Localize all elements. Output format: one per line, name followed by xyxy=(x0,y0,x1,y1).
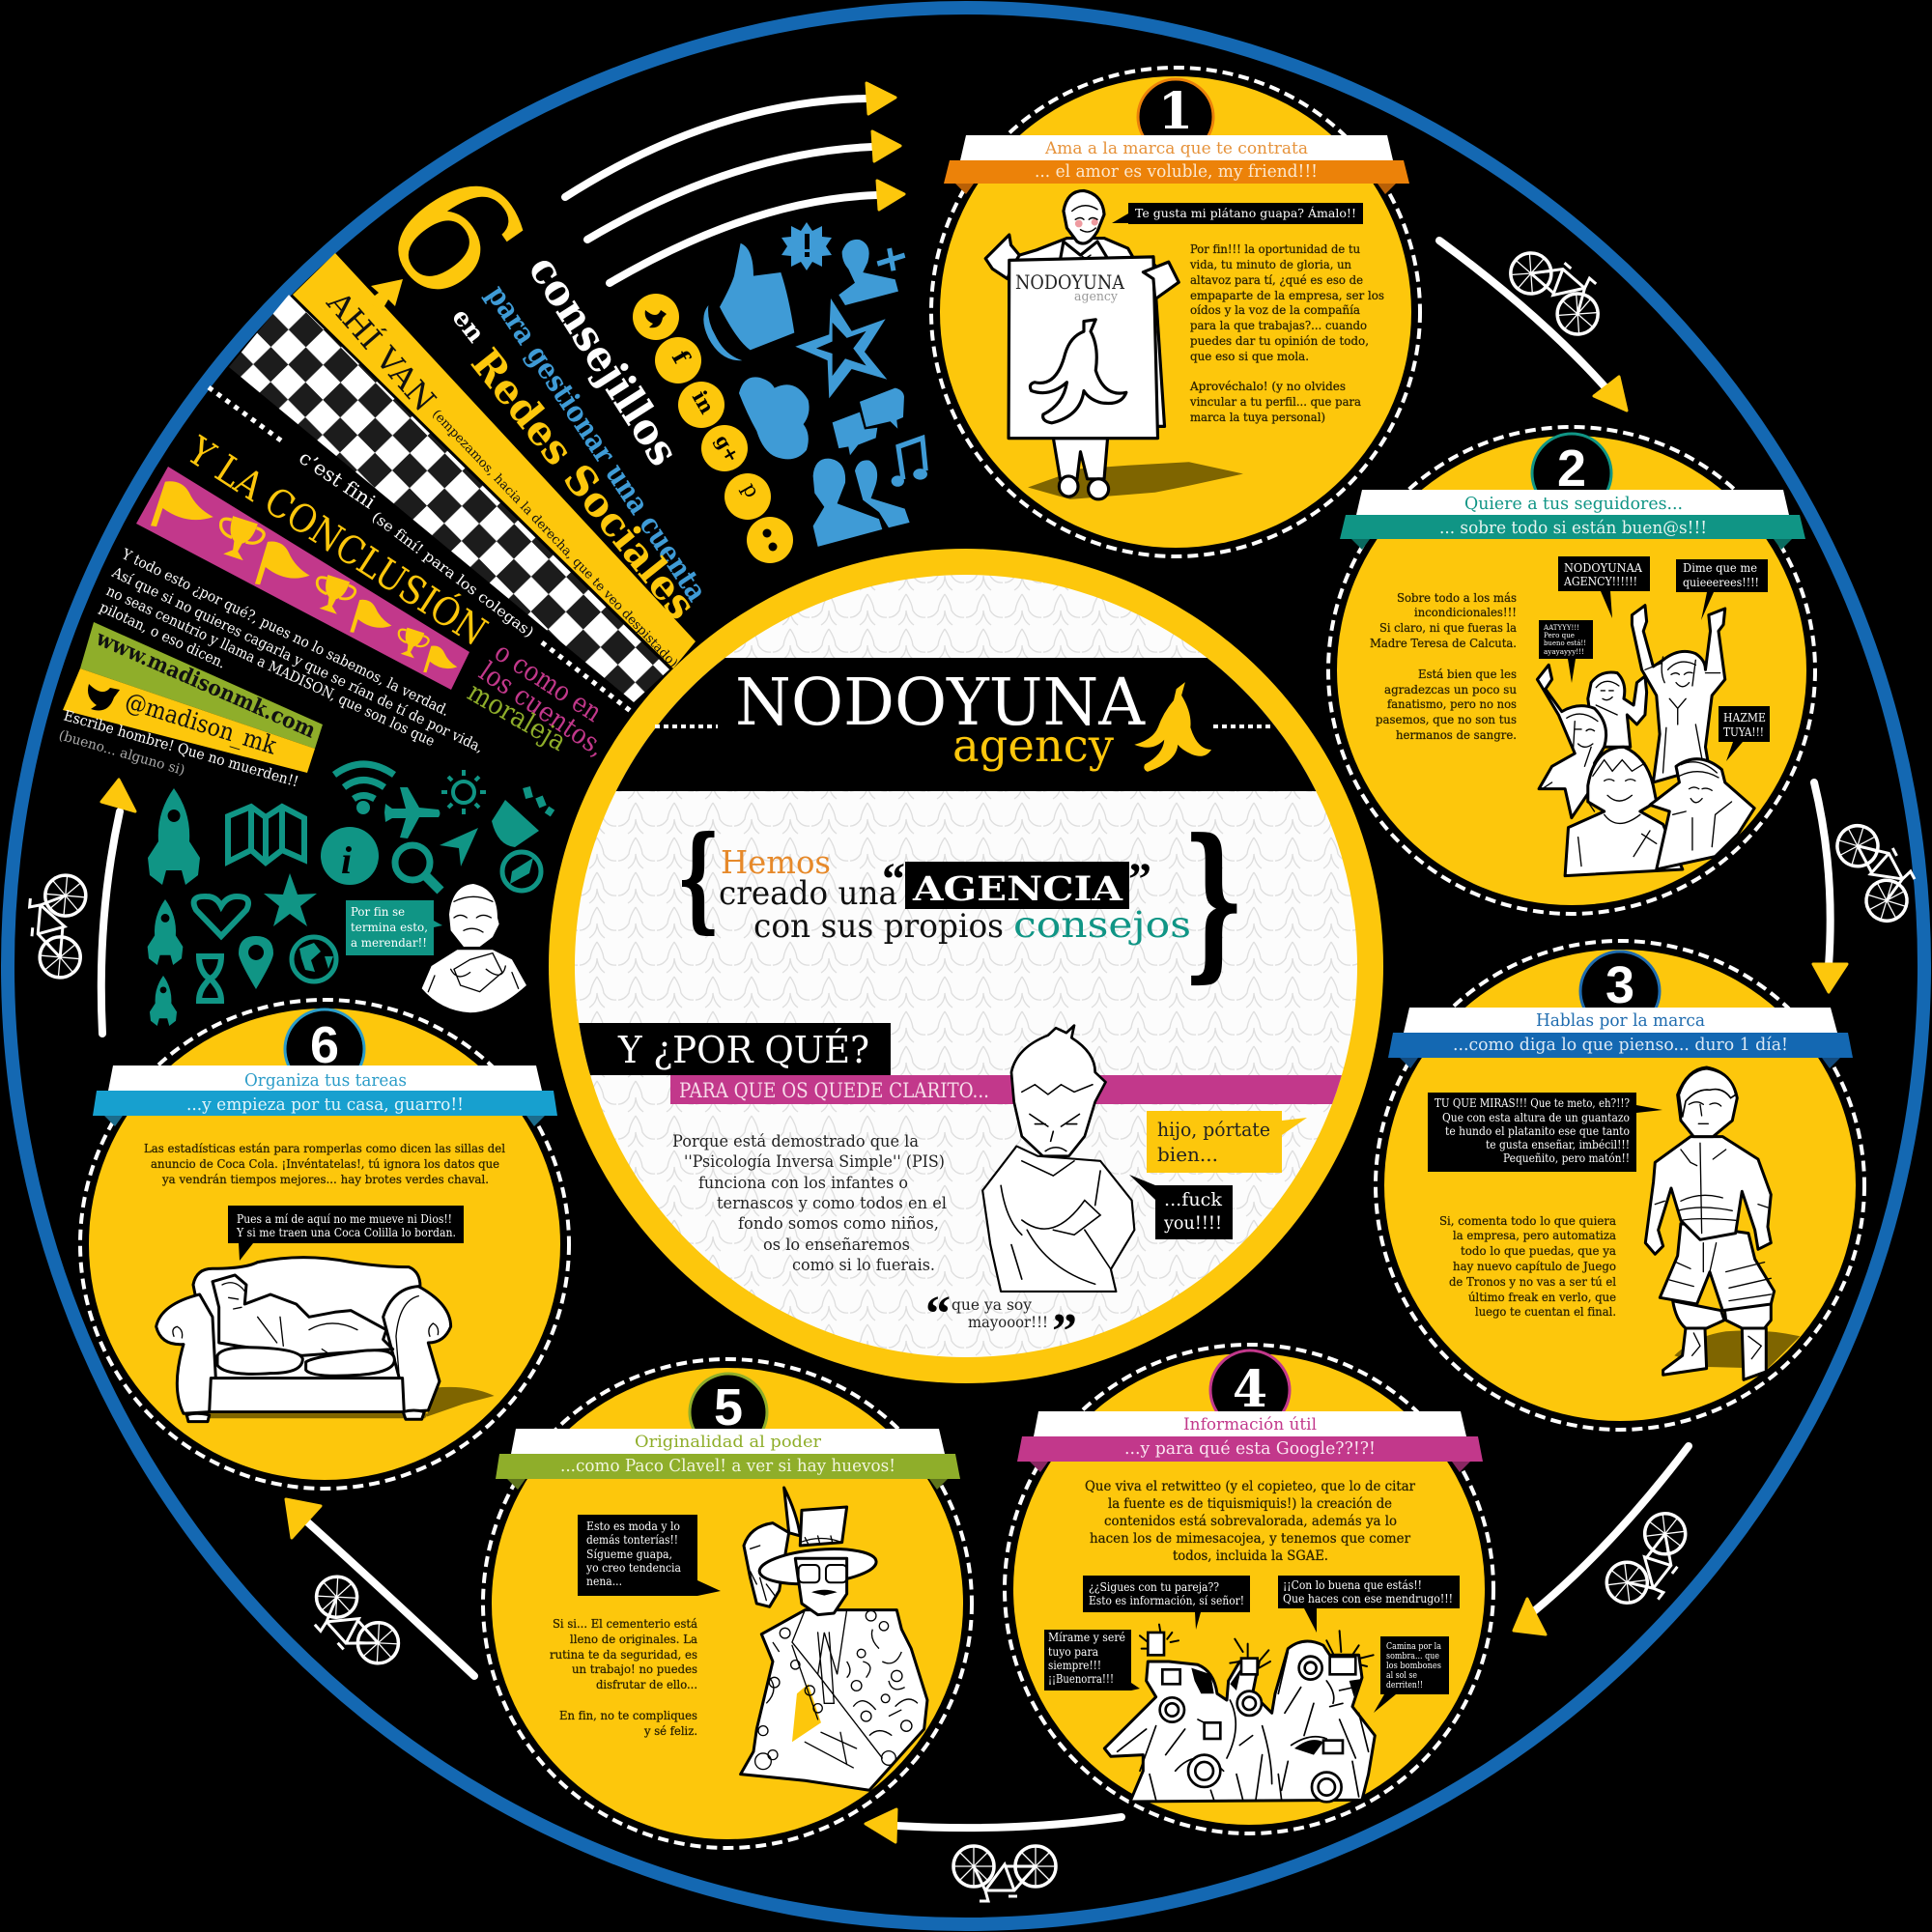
body text 5: En fin, no te compliques xyxy=(559,1708,697,1722)
illustration: man with banana sign xyxy=(985,190,1243,499)
body text: psicología inversa xyxy=(672,1132,947,1275)
speech bubble: hijo pórtate bien: hijo, pórtate xyxy=(1157,1118,1270,1141)
speech bubble 3: te hundo el platanito ese que tanto xyxy=(1445,1124,1630,1138)
icon: compass xyxy=(502,852,541,891)
text: c'est fini: c’est fini xyxy=(295,445,380,513)
icon: hourglass xyxy=(199,956,221,1001)
ribbon title 6: Organiza tus tareas xyxy=(244,1070,407,1091)
body text: psicología inversa: os lo enseñaremos xyxy=(763,1236,910,1255)
speech bubbles 2: Pero que xyxy=(1544,631,1576,639)
body text 2: Madre Teresa de Calcuta. xyxy=(1370,636,1517,650)
title: 6 consejillos para gestionar una cuenta en Redes Sociales: para gestionar una cuenta xyxy=(479,279,714,608)
ribbon title 3: ...como diga lo que pienso... duro 1 día! xyxy=(1453,1035,1788,1055)
body text 3: hay nuevo capítulo de Juego xyxy=(1453,1259,1616,1273)
social media circles: f xyxy=(667,346,696,369)
icon: add person xyxy=(838,240,905,305)
ribbon title 3: Hablas por la marca xyxy=(1536,1010,1705,1031)
body text 1: que eso si que mola. xyxy=(1190,349,1309,363)
icon: star xyxy=(264,873,317,926)
big number 6: 6 xyxy=(345,140,560,333)
number badge 4: 4 xyxy=(1233,1360,1267,1419)
body text 1: altavoz para tí, ¿qué es eso de xyxy=(1190,272,1363,287)
speech bubble 5: yo creo tendencia xyxy=(585,1561,681,1575)
social media circles xyxy=(633,294,793,563)
ribbon title 6: ...y empieza por tu casa, guarro!! xyxy=(186,1094,464,1115)
number badge 1: 1 xyxy=(1158,82,1193,141)
speech bubbles 4: Que haces con ese mendrugo!!! xyxy=(1283,1592,1453,1605)
icon: heart xyxy=(194,896,248,936)
headline: Hemos creado una agencia xyxy=(676,804,1245,998)
speech bubble 1: Te gusta mi plátano guapa? Ámalo!! xyxy=(1135,206,1356,220)
illustration: angry boy xyxy=(982,1026,1134,1292)
icon: map pin xyxy=(239,936,273,989)
arrow and bike: circle 1 to 2 xyxy=(1439,234,1627,411)
body text 1: vincular a tu perfil... que para xyxy=(1189,394,1362,409)
illustration: dwarf in armor xyxy=(1645,1067,1800,1379)
speech bubbles 2 xyxy=(1539,556,1770,761)
speech bubble: por fin se termina esto xyxy=(346,900,442,955)
text: moraleja: los cuentos, xyxy=(473,655,611,763)
speech bubble: por fin se termina esto: Por fin se xyxy=(351,904,405,919)
ribbon title 5: ...como Paco Clavel! a ver si hay huevos! xyxy=(560,1456,895,1476)
headline: Hemos creado una agencia: con sus propios xyxy=(753,907,1004,946)
magenta subheading bar: PARA QUE OS QUEDE CLARITO... xyxy=(679,1079,989,1102)
speech bubbles 2: Dime que me xyxy=(1683,561,1757,575)
text: c'est fini xyxy=(295,445,537,641)
body text 2: Si claro, ni que fueras la xyxy=(1379,620,1518,635)
illustration: man asleep on sofa xyxy=(156,1258,495,1422)
speech bubble 5 xyxy=(578,1515,721,1596)
speech bubble 5: Esto es moda y lo xyxy=(586,1520,680,1533)
speech bubbles 2: quieeerees!!!! xyxy=(1683,576,1759,589)
yellow band: ahí van: AHÍ VAN xyxy=(319,284,443,418)
header band: logo xyxy=(616,658,1316,791)
body text 2: hermanos de sangre. xyxy=(1396,727,1517,742)
quote: que ya soy mayooor xyxy=(925,1287,1077,1359)
speech bubble 3: Que con esta altura de un guantazo xyxy=(1442,1111,1630,1124)
body text 1: para la que trabajas?... cuando xyxy=(1190,318,1367,332)
sign logo xyxy=(1015,270,1124,304)
icon: airplane xyxy=(384,787,440,838)
central circle panel xyxy=(549,549,1383,1383)
body text 4 xyxy=(1085,1479,1415,1564)
speech bubble: fuck you: you!!!! xyxy=(1163,1212,1222,1234)
icon: wifi xyxy=(334,764,394,811)
body text: psicología inversa: como si lo fuerais. xyxy=(792,1256,935,1275)
speech bubbles 4: ¿¿Sigues con tu pareja?? xyxy=(1089,1580,1219,1594)
icon: navigation arrow xyxy=(440,828,478,867)
icon: thumbs up xyxy=(703,243,794,360)
heading: Y la conclusión: Y LA CONCLUSIÓN xyxy=(179,427,495,655)
body text 3: último freak en verlo, que xyxy=(1468,1290,1616,1304)
body text 1: empaparte de la empresa, ser los xyxy=(1190,288,1384,302)
speech bubbles 2: HAZME xyxy=(1723,711,1766,724)
body text 4: Que viva el retwitteo (y el copieteo, que lo de citar xyxy=(1085,1479,1415,1494)
speech bubble 6: Pues a mí de aquí no me mueve ni Dios!! xyxy=(237,1212,452,1226)
body text 1: Por fin!!! la oportunidad de tu xyxy=(1190,242,1360,256)
panel: tip 6 xyxy=(80,1000,569,1489)
ribbon title 6 xyxy=(93,1065,557,1126)
arrow and bike: left to top xyxy=(24,780,135,1034)
logo word agency: agency xyxy=(952,720,1114,773)
speech bubble 5: nena... xyxy=(586,1575,622,1588)
panel: tip 1 xyxy=(931,68,1420,556)
speech bubbles 4: tuyo para xyxy=(1048,1645,1098,1659)
ribbon title 4: ...y para qué esta Google??!?! xyxy=(1124,1438,1376,1459)
icon: sun xyxy=(441,770,486,814)
ribbon title 4: Información útil xyxy=(1183,1415,1317,1435)
body text 2: pasemos, que no son tus xyxy=(1376,712,1517,726)
section heading: Y por qué xyxy=(575,1023,891,1075)
speech bubble 6: Y si me traen una Coca Colilla lo bordan. xyxy=(236,1226,456,1239)
number badge 4 xyxy=(1210,1350,1290,1430)
body text 5: y sé feliz. xyxy=(643,1723,697,1738)
headline: Hemos creado una agencia: creado una xyxy=(719,874,897,913)
speech bubble 1 xyxy=(1112,203,1363,224)
body text 1: oídos y la voz de la compañía xyxy=(1190,302,1361,317)
body text 1: vida, tu minuto de gloria, un xyxy=(1189,257,1351,271)
body text 1: marca la tuya personal) xyxy=(1190,410,1325,424)
text: escribe hombre: Escribe hombre! Que no muerden!! xyxy=(62,707,300,790)
body text: psicología inversa: fondo somos como niños, xyxy=(738,1214,939,1234)
dotted lines around c'est fini xyxy=(209,387,632,712)
body text 4: todos, incluida la SGAE. xyxy=(1173,1548,1328,1564)
number badge 2 xyxy=(1532,434,1611,513)
speech bubbles 2: AGENCY!!!!!! xyxy=(1563,575,1637,588)
quote: que ya soy mayooor: “ xyxy=(925,1287,951,1342)
speech bubble 3: TU QUE MIRAS!!! Que te meto, eh?!!? xyxy=(1435,1096,1630,1110)
body text 6: ya vendrán tiempos mejores... hay brotes verdes chaval. xyxy=(161,1172,489,1186)
speech bubbles 4: siempre!!! xyxy=(1048,1659,1101,1672)
logo word NODOYUNA: NODOYUNA xyxy=(735,665,1147,740)
number badge 6: 6 xyxy=(310,1016,339,1074)
body text 3: todo lo que puedas, que ya xyxy=(1461,1243,1617,1258)
magenta subheading bar xyxy=(670,1075,1366,1104)
body text 2: fanatismo, pero no nos xyxy=(1387,696,1517,711)
teal icons cluster xyxy=(148,764,553,1026)
body text: psicología inversa: funciona con los infantes o xyxy=(698,1174,908,1193)
icon: info xyxy=(321,827,379,885)
body text 2: incondicionales!!! xyxy=(1414,605,1517,619)
illustration: paparazzi xyxy=(1104,1625,1375,1802)
body text 5: disfrutar de ello... xyxy=(596,1677,697,1691)
body text 4: hacen los de mimesacojea, y tenemos que comer xyxy=(1090,1531,1410,1547)
conclusion paragraph: Así que si no quieres cagarla y que se rían de tí de por vida, xyxy=(108,563,486,756)
panel: tip 4 xyxy=(1005,1345,1493,1833)
section heading: Y por qué: Y ¿POR QUÉ? xyxy=(617,1029,869,1071)
body text 2: Está bien que les xyxy=(1418,667,1517,681)
speech bubble: hijo pórtate bien: bien... xyxy=(1157,1143,1218,1166)
body text 2: Sobre todo a los más xyxy=(1397,590,1517,605)
speech bubbles 2: TUYA!!! xyxy=(1723,725,1764,739)
sign logo: NODOYUNA xyxy=(1015,270,1124,294)
text: moraleja: o como en xyxy=(489,636,608,728)
panel: tip 5 xyxy=(483,1359,972,1848)
illustration: kid eating xyxy=(422,884,526,1012)
title: 6 consejillos para gestionar una cuenta en Redes Sociales: Redes Sociales xyxy=(462,340,705,628)
speech bubble 5: Sígueme guapa, xyxy=(586,1548,672,1561)
ribbon title 5 xyxy=(496,1429,960,1490)
body text 3: la empresa, pero automatiza xyxy=(1453,1228,1617,1242)
number badge 2: 2 xyxy=(1557,440,1586,497)
body text 3: luego te cuentan el final. xyxy=(1475,1304,1616,1319)
speech bubble 6 xyxy=(228,1206,464,1261)
number badge 1 xyxy=(1138,79,1213,155)
ribbon title 2: Quiere a tus seguidores... xyxy=(1464,494,1683,514)
quote: que ya soy mayooor: ” xyxy=(1052,1304,1077,1359)
body text: psicología inversa: ''Psicología Inversa Simple'' (PIS) xyxy=(684,1152,945,1172)
speech bubble: por fin se termina esto: termina esto, xyxy=(351,920,428,934)
illustration: crowd of fans xyxy=(1537,606,1754,876)
icon: music note xyxy=(892,438,927,487)
ribbon title 3 xyxy=(1388,1008,1853,1068)
speech bubbles 4 xyxy=(1044,1576,1460,1713)
speech bubble: por fin se termina esto: a merendar!! xyxy=(351,935,427,950)
checkered racing band xyxy=(229,295,669,702)
icon: alert burst xyxy=(781,222,832,270)
speech bubble: hijo pórtate bien xyxy=(1147,1111,1307,1173)
icon: flashlight bowl xyxy=(492,787,553,847)
body text: psicología inversa: ternascos y como todos en el xyxy=(717,1194,947,1213)
social media circles: p xyxy=(738,479,764,501)
speech bubble 3: te gusta enseñar, imbécil!!! xyxy=(1486,1138,1630,1151)
speech bubble: fuck you xyxy=(1129,1175,1233,1239)
speech bubbles 2: ayayayyy!!! xyxy=(1544,647,1584,656)
arrow and bike: circle 5 to 6 xyxy=(286,1499,474,1681)
speech bubbles 4: ¡¡Con lo buena que estás!! xyxy=(1283,1578,1422,1592)
speech bubbles 2: bueno está!! xyxy=(1544,639,1586,647)
icon: chat bubbles xyxy=(833,388,904,455)
body text 4: contenidos está sobrevalorada, además ya lo xyxy=(1104,1514,1397,1529)
speech bubbles 2: NODOYUNAA xyxy=(1564,561,1642,575)
body text 3 xyxy=(1439,1213,1617,1319)
icon: yellow banana peel xyxy=(1134,682,1211,772)
social media circles: g+ xyxy=(711,431,743,467)
speech bubble 3 xyxy=(1428,1093,1662,1172)
quote: que ya soy mayooor: mayooor!!! xyxy=(968,1313,1048,1331)
headline: Hemos creado una agencia: “ xyxy=(882,854,905,905)
text: moraleja: moraleja xyxy=(462,675,572,757)
ribbon title 4 xyxy=(1017,1411,1483,1472)
title: 6 consejillos para gestionar una cuenta en Redes Sociales xyxy=(445,247,714,628)
conclusion paragraph: Y todo esto ¿por qué?, pues no lo sabemos, la verdad. xyxy=(118,545,452,720)
speech bubbles 2: AATYYY!!! xyxy=(1543,623,1579,632)
ribbon title 1 xyxy=(944,135,1409,194)
speech bubbles 4: al sol se xyxy=(1386,1671,1417,1681)
body text 2 xyxy=(1370,590,1518,742)
number badge 5: 5 xyxy=(714,1378,743,1436)
text: c'est fini: (se finí! para los colegas) xyxy=(369,508,537,641)
speech bubbles 4: sombra... que xyxy=(1386,1652,1439,1662)
body text 5: un trabajo! no puedes xyxy=(572,1662,697,1676)
body text 3: de Tronos y no vas a ser tú el xyxy=(1449,1274,1616,1289)
speech bubbles 4: Camina por la xyxy=(1386,1642,1442,1652)
icon: people xyxy=(813,459,910,547)
ribbon title 2: ... sobre todo si están buen@s!!! xyxy=(1439,518,1707,538)
ribbon title 5: Originalidad al poder xyxy=(635,1433,822,1452)
ribbon title 1: Ama a la marca que te contrata xyxy=(1044,139,1308,158)
contact strips: web and twitter: @madison_mk xyxy=(122,687,280,760)
body text 6 xyxy=(144,1141,505,1186)
sign logo: agency xyxy=(1074,290,1119,304)
speech bubble 5: demás tonterías!! xyxy=(586,1533,678,1547)
headline: Hemos creado una agencia: { xyxy=(676,811,721,945)
icon: globe xyxy=(292,937,336,981)
ribbon title 1: ... el amor es voluble, my friend!!! xyxy=(1035,161,1318,182)
yellow band: ahí van: (empezamos, hacia la derecha, que te veo despistado) xyxy=(429,407,680,670)
illustration: dandy with feathered hat xyxy=(741,1488,927,1790)
yellow band: ahí van xyxy=(293,253,696,670)
magenta strip with flags and trophies xyxy=(136,467,469,690)
number badge 3 xyxy=(1580,952,1660,1031)
body text 1: Aprovéchalo! (y no olvides xyxy=(1189,379,1346,393)
arrow and bike: circle 4 to 5 xyxy=(866,1809,1122,1901)
arrows: three top arrows xyxy=(565,83,904,283)
panel: tip 2 xyxy=(1328,427,1815,914)
body text 5: Si si... El cementerio está xyxy=(553,1616,697,1631)
text: escribe hombre: (bueno... alguno si) xyxy=(57,727,186,779)
ribbon title 2 xyxy=(1340,490,1805,550)
conclusion paragraph: pilotan, o eso dicen. xyxy=(97,598,229,672)
body text 1 xyxy=(1189,242,1384,424)
icon: info: i xyxy=(341,838,352,882)
arrow and bike: circle 3 to 4 xyxy=(1514,1446,1705,1634)
arrow and bike: circle 2 to 3 xyxy=(1813,782,1927,992)
speech bubble 3: Pequeñito, pero matón!! xyxy=(1503,1151,1630,1165)
number badge 3: 3 xyxy=(1605,956,1634,1014)
title: 6 consejillos para gestionar una cuenta en Redes Sociales: consejillos xyxy=(519,247,688,474)
headline: Hemos creado una agencia: Hemos xyxy=(721,843,831,881)
title: 6 consejillos para gestionar una cuenta en Redes Sociales: en xyxy=(445,303,490,349)
body text 5 xyxy=(550,1616,698,1738)
icon: star outline xyxy=(795,298,887,398)
headline: Hemos creado una agencia: ” xyxy=(1128,854,1151,905)
body text: psicología inversa: Porque está demostrado que la xyxy=(672,1132,919,1151)
body text 2: agradezcas un poco su xyxy=(1384,682,1517,696)
speech bubbles 4: Mírame y seré xyxy=(1048,1631,1125,1644)
body text 6: anuncio de Coca Cola. ¡Invéntatelas!, tú ignora los datos que xyxy=(151,1156,499,1171)
icon: magnifier xyxy=(395,845,440,891)
text: moraleja xyxy=(462,636,611,763)
headline: Hemos creado una agencia: } xyxy=(1182,804,1245,998)
social media circles: in xyxy=(688,386,720,418)
panel: tip 3 xyxy=(1376,941,1864,1430)
icon: map xyxy=(228,807,304,863)
icon: cloud xyxy=(739,377,810,459)
icon: rockets xyxy=(148,788,200,1026)
blue social icons xyxy=(703,222,927,547)
number badge 5 xyxy=(690,1374,767,1451)
body text 5: rutina te da seguridad, es xyxy=(550,1647,697,1662)
speech bubbles 4: Esto es información, sí señor! xyxy=(1089,1594,1244,1607)
conclusion paragraph: no seas cenutrio y llama a MADISON, que son los que xyxy=(103,582,438,750)
body text 1: puedes dar tu opinión de todo, xyxy=(1190,333,1369,348)
headline: Hemos creado una agencia: consejos xyxy=(1013,904,1191,946)
speech bubbles 4: derriten!! xyxy=(1386,1681,1423,1690)
body text 4: la fuente es de tiquismiquis!) la creación de xyxy=(1108,1496,1392,1512)
quote: que ya soy mayooor: que ya soy xyxy=(952,1295,1032,1314)
body text 3: Si, comenta todo lo que quiera xyxy=(1439,1213,1617,1228)
speech bubbles 4: ¡¡Buenorra!!! xyxy=(1048,1672,1114,1686)
dotted rule left and right xyxy=(655,724,1273,728)
contact strips: web and twitter: www.madisonmk.com xyxy=(92,625,320,744)
body text 5: lleno de originales. La xyxy=(570,1632,698,1646)
speech bubble: fuck you: ...fuck xyxy=(1164,1189,1222,1210)
body text 6: Las estadísticas están para romperlas como dicen las sillas del xyxy=(144,1141,505,1155)
speech bubbles 4: los bombones xyxy=(1386,1662,1441,1671)
number badge 6 xyxy=(285,1009,364,1089)
headline: Hemos creado una agencia: AGENCIA xyxy=(912,869,1123,909)
